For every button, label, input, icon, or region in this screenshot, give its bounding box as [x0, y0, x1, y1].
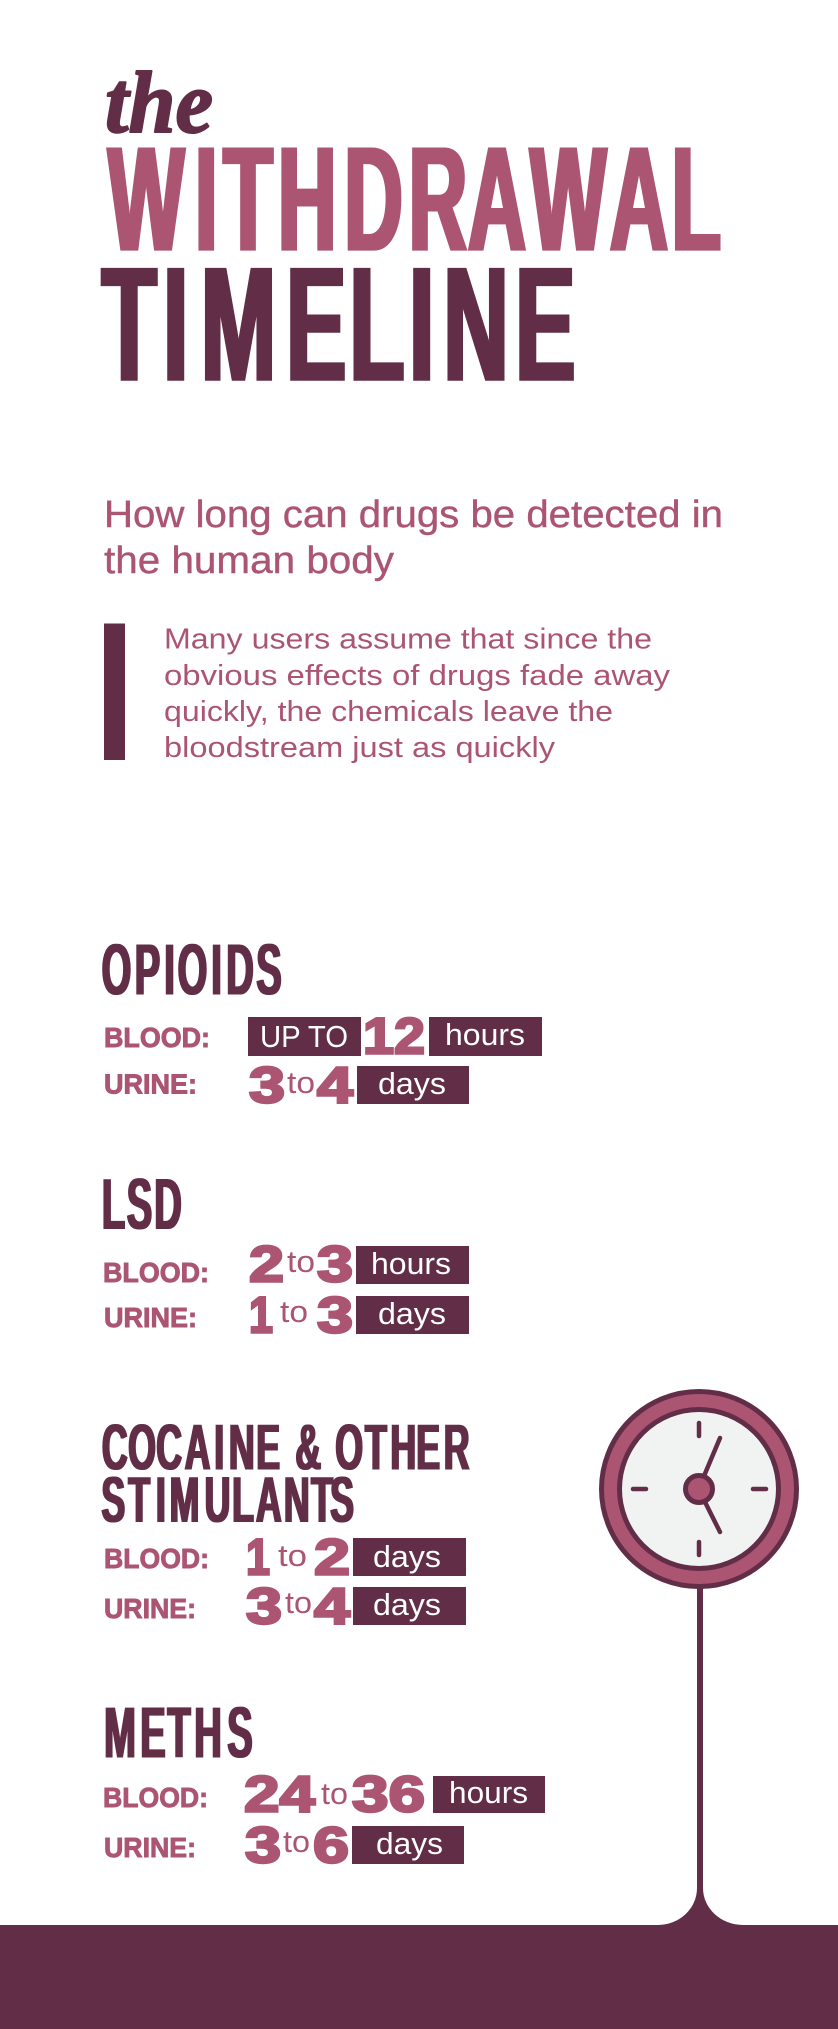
urine row: 3 to 6 days: URINE:: [104, 1832, 196, 1863]
urine row: 3 to 4 days: to: [285, 1585, 312, 1620]
blood row: 24 to 36 hours: [103, 1766, 545, 1822]
blood row: 1 to 2 days: to: [278, 1538, 307, 1573]
urine row: 3 to 4 days: [104, 1578, 466, 1634]
intro text block: Many users assume that since the: [164, 624, 652, 656]
heading: cocaine and other stimulants: COCAINE & OTHER: [102, 1412, 470, 1484]
urine row: 3 to 4 days: [104, 1056, 469, 1114]
blood row: 1 to 2 days: BLOOD:: [104, 1543, 209, 1574]
heading: cocaine and other stimulants: STIMULANTS: [101, 1465, 354, 1537]
urine row: 3 to 6 days: 6: [313, 1816, 349, 1874]
blood row: 2 to 3 hours: hours: [371, 1246, 451, 1281]
blood row: up to 12 hours: hours: [445, 1017, 525, 1052]
urine row: 1 to 3 days: [104, 1286, 469, 1344]
urine row: 3 to 4 days: to: [287, 1065, 315, 1100]
title: the: [105, 55, 213, 152]
blood row: 2 to 3 hours: to: [287, 1244, 315, 1279]
blood row: up to 12 hours: [104, 1008, 542, 1064]
urine row: 3 to 6 days: [104, 1816, 464, 1874]
blood row: 2 to 3 hours: [103, 1236, 469, 1292]
panel: opioids: [102, 931, 542, 1114]
urine row: 3 to 4 days: 4: [314, 1578, 351, 1634]
accent bar: [104, 624, 125, 760]
title: WITHDRAWAL: [108, 115, 721, 283]
intro text block: obvious effects of drugs fade away: [164, 660, 671, 692]
urine row: 3 to 4 days: URINE:: [104, 1068, 197, 1100]
urine row: 1 to 3 days: 1: [249, 1286, 273, 1344]
urine row: 3 to 4 days: days: [373, 1587, 441, 1622]
urine row: 3 to 6 days: 3: [245, 1816, 281, 1874]
urine row: 3 to 4 days: days: [378, 1066, 446, 1101]
blood row: 24 to 36 hours: 24: [244, 1766, 316, 1822]
blood row: 2 to 3 hours: 3: [317, 1236, 353, 1292]
title: TIMELINE: [102, 233, 575, 417]
panel: lsd: [102, 1165, 469, 1344]
heading: opioids: OPIOIDS: [102, 931, 282, 1011]
blood row: 24 to 36 hours: to: [321, 1776, 348, 1811]
urine row: 1 to 3 days: days: [378, 1296, 446, 1331]
intro text block: quickly, the chemicals leave the: [164, 696, 613, 728]
panel: cocaine and other stimulants: [101, 1412, 470, 1634]
urine row: 3 to 6 days: to: [283, 1824, 310, 1859]
urine row: 1 to 3 days: to: [280, 1294, 308, 1329]
blood row: 1 to 2 days: 1: [246, 1528, 270, 1586]
intro text block: bloodstream just as quickly: [164, 732, 556, 764]
icon: clock: [602, 1392, 796, 1586]
urine row: 3 to 6 days: days: [376, 1826, 443, 1861]
panel: meths: [103, 1694, 545, 1874]
urine row: 1 to 3 days: 3: [317, 1286, 353, 1344]
urine row: 3 to 4 days: 3: [249, 1056, 285, 1114]
urine row: 3 to 4 days: URINE:: [104, 1593, 196, 1624]
blood row: 24 to 36 hours: hours: [449, 1775, 528, 1810]
subtitle: How long can drugs be detected in: [104, 494, 723, 536]
blood row: 1 to 2 days: [104, 1528, 466, 1586]
heading: lsd: LSD: [102, 1165, 182, 1245]
blood row: 2 to 3 hours: BLOOD:: [103, 1257, 209, 1288]
urine row: 3 to 4 days: 3: [246, 1578, 282, 1634]
blood row: 24 to 36 hours: 36: [352, 1766, 425, 1822]
title: [102, 55, 721, 417]
blood row: 2 to 3 hours: 2: [249, 1236, 284, 1292]
intro text block: [164, 624, 671, 764]
heading: meths: METHS: [104, 1694, 253, 1774]
urine row: 1 to 3 days: URINE:: [104, 1302, 197, 1333]
blood row: 24 to 36 hours: BLOOD:: [103, 1782, 208, 1813]
blood row: 1 to 2 days: 2: [314, 1528, 350, 1586]
heading: cocaine and other stimulants: [101, 1412, 470, 1537]
subtitle: [104, 494, 723, 582]
urine row: 3 to 4 days: 4: [317, 1056, 354, 1114]
blood row: up to 12 hours: BLOOD:: [104, 1022, 210, 1053]
subtitle: the human body: [104, 540, 394, 582]
blood row: 1 to 2 days: days: [373, 1539, 441, 1574]
footer band with timeline stem: [0, 1585, 838, 2029]
blood row: up to 12 hours: UP TO: [260, 1019, 348, 1054]
blood row: up to 12 hours: 12: [363, 1008, 425, 1064]
